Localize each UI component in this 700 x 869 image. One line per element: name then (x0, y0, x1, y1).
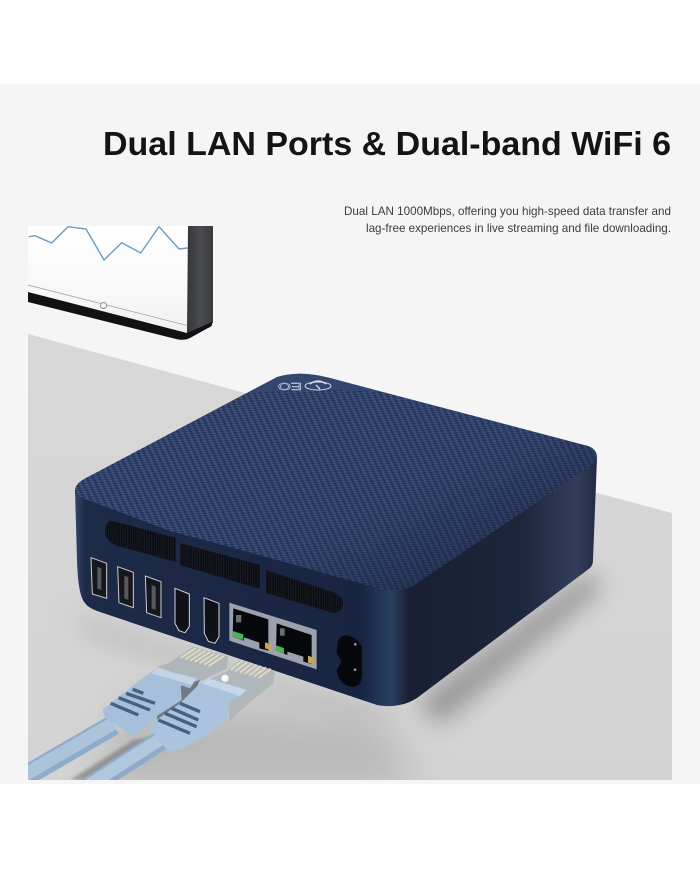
power socket (337, 635, 362, 687)
PC body sides (75, 458, 597, 706)
description text (344, 204, 671, 235)
description text: lag-free experiences in live streaming and file downloading. (366, 221, 671, 235)
cable shadow between cables (70, 736, 148, 780)
logo: EO (278, 380, 331, 392)
logo: EO: EO (278, 380, 302, 392)
LEDs amber (265, 642, 315, 665)
title: Dual LAN Ports & Dual-band WiFi 6 (103, 125, 671, 162)
LAN plate (229, 603, 317, 669)
PC top surface (75, 374, 597, 590)
front metal head (210, 660, 275, 721)
USB tongues (97, 567, 156, 610)
rear boot (103, 668, 197, 737)
front cable (87, 660, 275, 788)
ethernet cables (28, 646, 275, 780)
HDMI ports (175, 588, 219, 643)
table surface (28, 334, 672, 780)
monitor with line chart (28, 226, 213, 340)
table shadows (70, 570, 600, 790)
description text: Dual LAN 1000Mbps, offering you high-speed data transfer and (344, 204, 671, 218)
chart line (29, 227, 188, 260)
rear cable (28, 646, 228, 780)
vents (105, 521, 343, 613)
mini PC (75, 374, 597, 706)
USB ports (91, 558, 161, 618)
LAN jacks (233, 608, 312, 664)
LEDs green (233, 631, 284, 654)
front boot (150, 678, 247, 752)
logo band (250, 374, 381, 393)
rear side shadow (157, 680, 200, 720)
LAN latches (236, 615, 285, 636)
ports, drawn in 3x local coordinates (91, 558, 362, 687)
rear metal head (157, 647, 228, 682)
